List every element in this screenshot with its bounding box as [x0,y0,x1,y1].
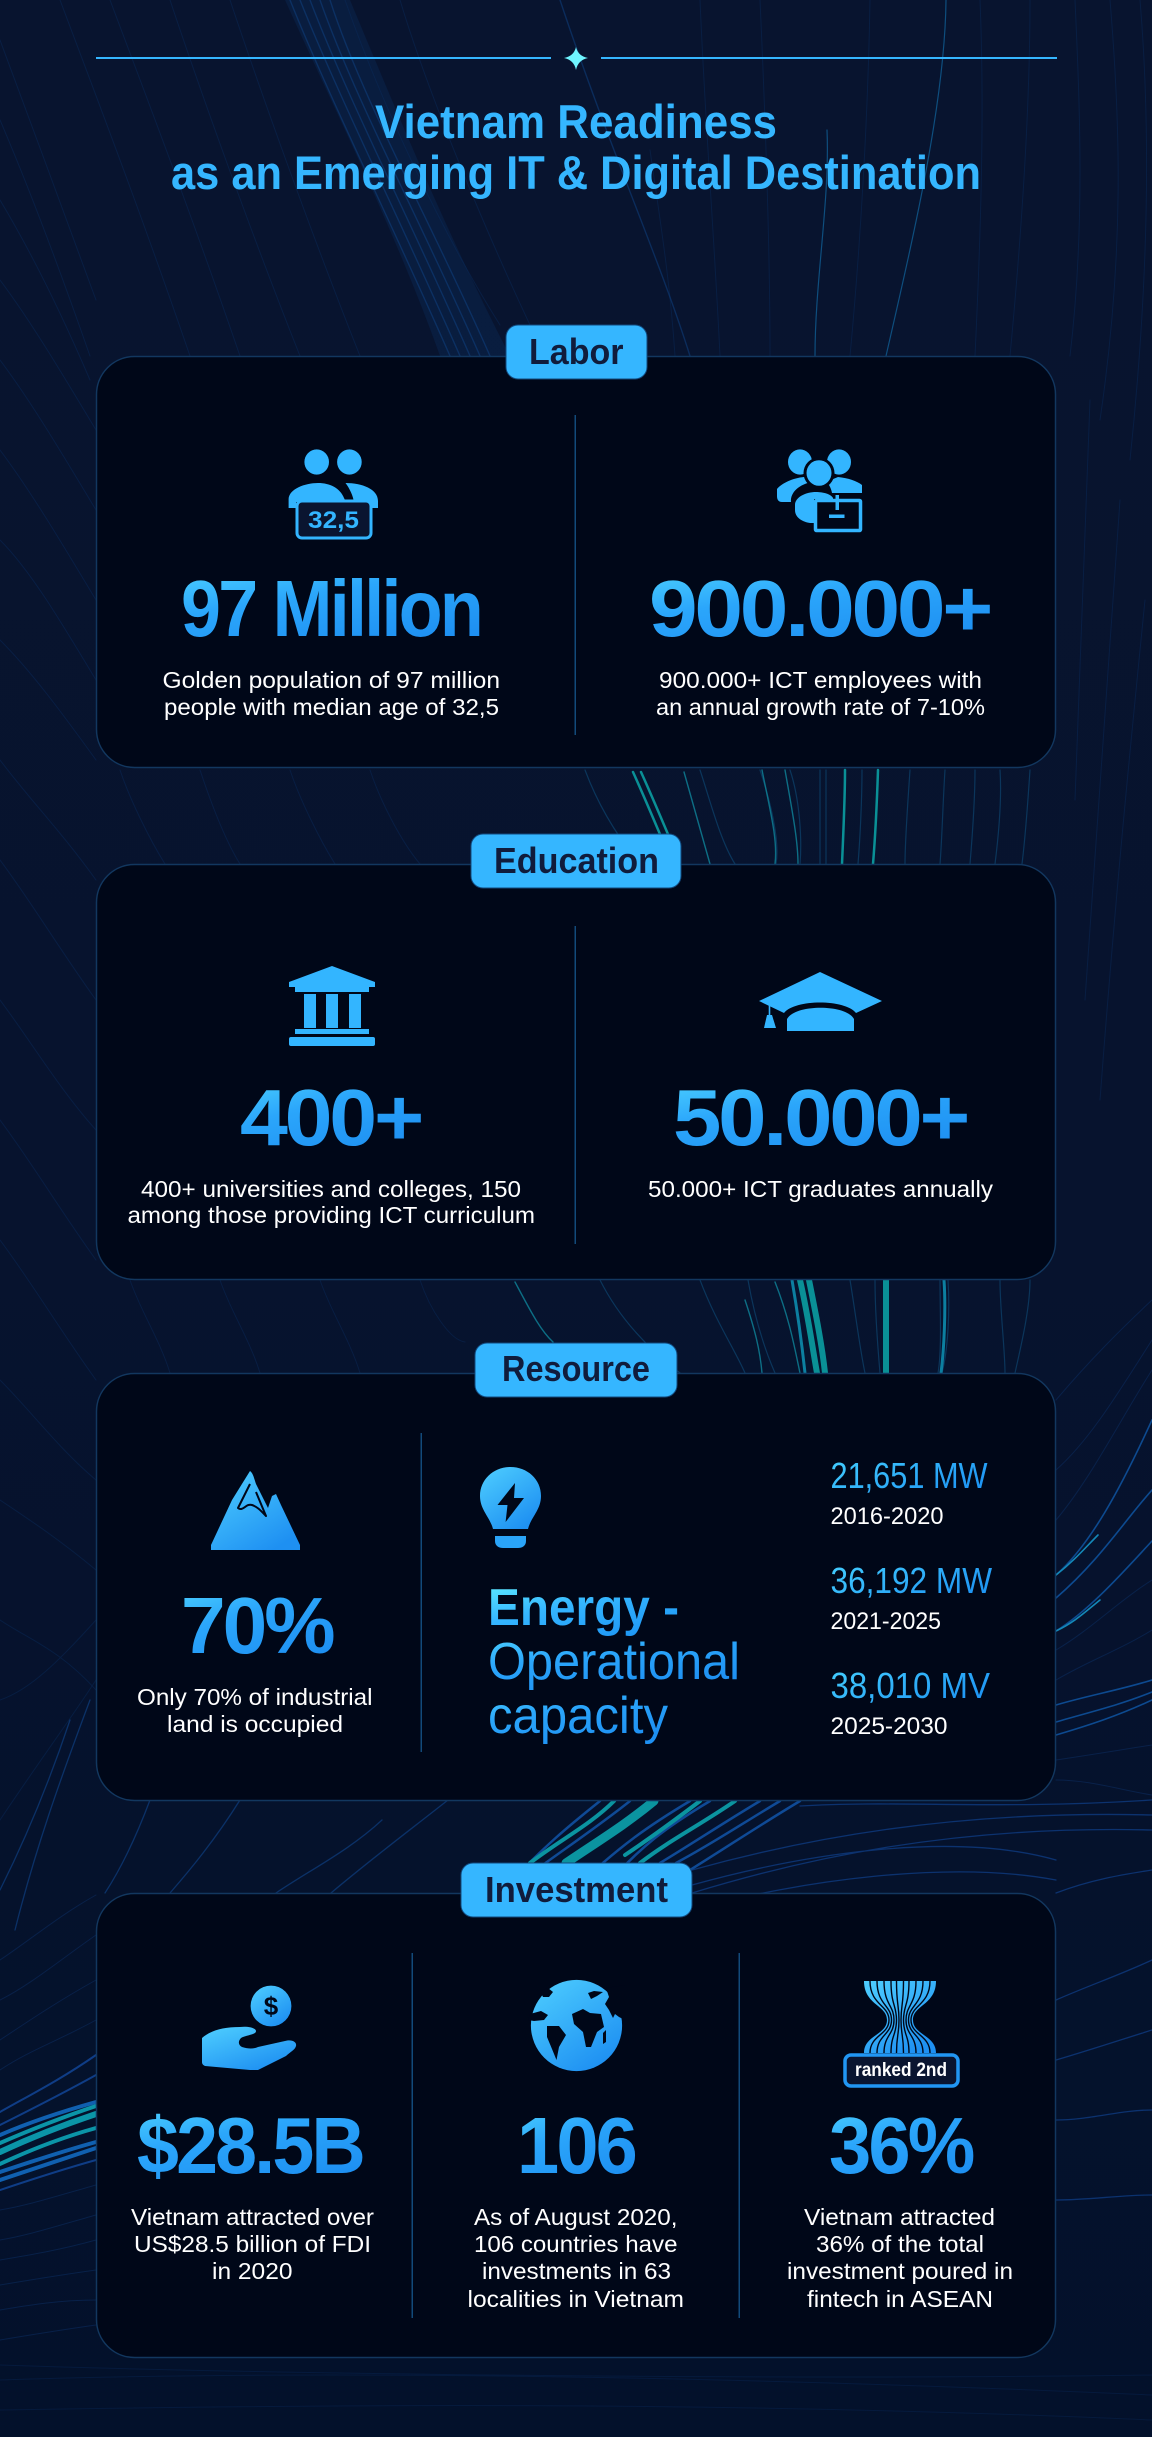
text: fintech: investment poured in [787,2258,1013,2284]
icon: globe [528,1980,625,2071]
heading: Energy - Operational capacity: Operational [488,1633,740,1691]
stat: 36%: 36% [829,2101,974,2190]
text: countries: localities in Vietnam [468,2286,684,2312]
text: universities and colleges [128,1176,535,1228]
stat: 2016-2020 capacity [830,1455,988,1530]
text: countries: As of August 2020, [474,2204,678,2230]
text: universities and colleges: among those providing ICT curriculum [128,1202,535,1228]
text: fintech: 36% of the total [816,2231,984,2257]
stat: 97 Million: 97 Million [181,564,481,653]
heading: Energy - Operational capacity [488,1579,740,1745]
text: industrial land: land is occupied [167,1711,343,1737]
title: as an Emerging IT & Digital Destination [171,146,981,199]
text: FDI: in 2020 [212,2258,292,2284]
education card background [96,864,1056,1280]
icon: university building [289,966,375,1046]
stat: 400+: 400+ [240,1073,421,1162]
text: golden population: Golden population of 97 million [162,667,500,693]
resource card background [96,1374,1056,1800]
stat: 2021-2025 capacity [830,1560,992,1635]
heading pill: Education [471,834,681,888]
icon: people with median age badge [289,449,378,538]
panel: labor [96,325,1056,768]
text: fintech: fintech in ASEAN [807,2286,993,2312]
stat: 106: 106 [517,2101,635,2190]
stat: $28.5B: $28.5B [137,2101,363,2190]
text: FDI: Vietnam attracted over [131,2204,374,2230]
icon: hand with dollar coin [202,1986,296,2070]
heading pill: Education: Education [494,840,659,881]
heading pill: Investment: Investment [485,1869,668,1910]
stat: 2021-2025 capacity: 36,192 MW [830,1560,992,1601]
text: industrial land [137,1684,372,1737]
text: fintech: Vietnam attracted [804,2204,995,2230]
text: FDI [131,2204,374,2284]
icon: hand with dollar coin: $ [264,1991,279,2021]
text: industrial land: Only 70% of industrial [137,1684,372,1710]
stat: 70%: 70% [181,1581,334,1670]
heading pill: Investment [461,1863,692,1917]
title [171,95,981,199]
heading: Energy - Operational capacity: capacity [488,1687,668,1745]
icon: ICT employees group with briefcase [777,449,862,530]
title: Vietnam Readiness [375,95,777,148]
panel: education [96,834,1056,1280]
heading pill: Resource [475,1343,677,1397]
panel: investment [96,1863,1056,2358]
icon: sparkle star [564,47,588,70]
labor card background [96,356,1056,768]
header decoration: line with star [96,47,1057,70]
text: ICT graduates: 50.000+ ICT graduates annually [648,1176,994,1202]
text: FDI: US$28.5 billion of FDI [134,2231,371,2257]
text: ICT employees: an annual growth rate of 7-10% [656,694,985,720]
investment card background [96,1894,1056,2358]
stat: 2016-2020 capacity: 21,651 MW [830,1455,988,1496]
stat: 50.000+: 50.000+ [673,1073,967,1162]
text: countries [468,2204,684,2312]
icon: mountain [211,1471,300,1550]
stat: 2025-2030 capacity: 2025-2030 [830,1713,948,1740]
stat: 2016-2020 capacity: 2016-2020 [830,1503,944,1530]
text: fintech [787,2204,1013,2312]
stat: 900.000+: 900.000+ [649,564,990,653]
stat: 2021-2025 capacity: 2021-2025 [830,1608,941,1635]
text: ICT employees: 900.000+ ICT employees with [659,667,982,693]
text: golden population: people with median age of 32,5 [164,694,499,720]
icon: graduation cap [759,972,882,1031]
icon: ASEAN rice stalks with ranked 2nd badge [845,1981,958,2086]
text: ICT employees [656,667,985,720]
icon: ASEAN rice stalks with ranked 2nd badge: ranked 2nd [855,2060,947,2081]
text: countries: 106 countries have [474,2231,678,2257]
text: universities and colleges: 400+ universities and colleges, 150 [141,1176,521,1202]
text: countries: investments in 63 [482,2258,671,2284]
heading: Energy - Operational capacity: Energy - [488,1579,679,1637]
heading pill: Labor: Labor [529,331,624,372]
text: golden population [162,667,500,720]
icon: energy bulb [480,1467,541,1548]
stat: 2025-2030 capacity: 38,010 MV [830,1665,990,1706]
heading pill: Resource: Resource [502,1348,650,1389]
icon: people with median age badge: 32,5 [308,507,359,534]
panel: resource [96,1343,1056,1800]
stat: 2025-2030 capacity [830,1665,990,1740]
heading pill: Labor [506,325,647,379]
